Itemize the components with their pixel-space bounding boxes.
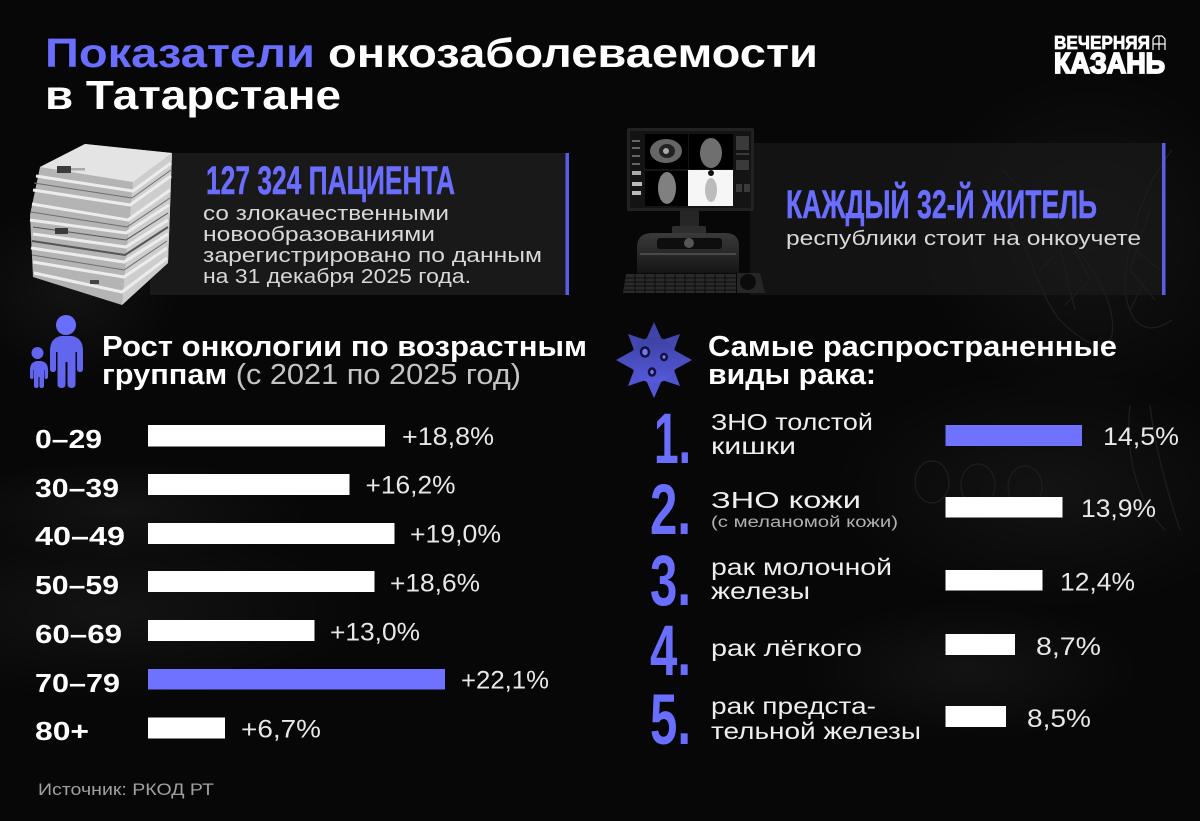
rank 4: 8,7%	[1036, 633, 1101, 661]
rank 5: тельной железы	[711, 718, 921, 744]
rank 2: ЗНО кожи	[711, 487, 861, 513]
rank 3: 3.	[650, 542, 691, 621]
rank 3	[650, 542, 1135, 621]
heading: patients count: 127 324 ПАЦИЕНТА	[206, 159, 455, 203]
rank 1: 1.	[654, 400, 691, 479]
rank 5	[650, 681, 1091, 760]
row 70–79	[35, 666, 549, 698]
text: on oncology register: республики стоит на онкоучете	[786, 227, 1141, 250]
rank 2: 2.	[650, 471, 691, 550]
rank 2: 13,9%	[1081, 495, 1156, 523]
logo: Вечерняя Казань: КАЗАНЬ	[1054, 48, 1165, 80]
row 0–29: +18,8%	[402, 423, 494, 451]
rank 5: 8,5%	[1027, 705, 1091, 733]
row 80+: +6,7%	[241, 716, 321, 744]
heading: most common cancers	[708, 331, 1117, 391]
text: patients description: на 31 декабря 2025 года.	[203, 265, 471, 288]
row 70–79: 70–79	[35, 668, 120, 698]
rank 4: 4.	[650, 612, 691, 691]
row 60–69: +13,0%	[330, 618, 420, 646]
row 80+	[35, 716, 321, 746]
row 60–69: 60–69	[35, 619, 122, 649]
title: в Татарстане	[45, 72, 341, 118]
icon: medical workstation	[623, 128, 765, 293]
panel: every 32nd resident	[623, 128, 1166, 295]
rank 3: железы	[711, 578, 810, 604]
heading: growth by age groups: группам (с 2021 по 2025 год)	[102, 359, 521, 391]
rank 3: рак молочной	[711, 554, 892, 580]
row 40–49: 40–49	[35, 521, 125, 551]
logo: Вечерняя Казань: ВЕЧЕРНЯЯ	[1054, 33, 1150, 53]
icon: cancer cell	[616, 322, 692, 398]
row 80+: 80+	[35, 716, 89, 746]
row 50–59	[35, 570, 480, 600]
rank 1: ЗНО толстой	[711, 409, 873, 435]
rank 4: рак лёгкого	[711, 635, 862, 661]
heading: most common cancers: виды рака:	[708, 359, 876, 391]
rank 3: 12,4%	[1060, 568, 1135, 596]
rank 2	[650, 471, 1156, 550]
row 40–49: +19,0%	[410, 520, 501, 548]
text: patients description: новообразованиями	[203, 223, 435, 246]
rank 1	[654, 400, 1179, 479]
row 50–59: +18,6%	[390, 570, 480, 598]
heading: most common cancers: Самые распространенные	[708, 331, 1117, 363]
title: Показатели онкозаболеваемости	[45, 30, 818, 76]
rank 5: 5.	[650, 681, 691, 760]
text: patients description: со злокачественными	[203, 202, 449, 225]
row 0–29: 0–29	[35, 424, 102, 454]
rank 5: рак предста-	[711, 693, 876, 719]
row 30–39: +16,2%	[366, 472, 456, 500]
row 50–59: 50–59	[35, 570, 119, 600]
list: cancer types	[650, 400, 1179, 760]
source: Источник: РКОД РТ	[38, 781, 214, 799]
icon: adult and child	[30, 315, 83, 388]
text: patients description	[203, 202, 542, 288]
heading: growth by age groups	[102, 331, 587, 391]
row 30–39	[35, 472, 456, 503]
row 0–29	[35, 423, 494, 454]
text: patients description: зарегистрировано по данным	[203, 244, 542, 267]
chart: growth by age	[35, 423, 549, 746]
panel: patients	[30, 144, 569, 305]
row 40–49	[35, 520, 501, 551]
rank 1: кишки	[711, 433, 796, 459]
row 70–79: +22,1%	[461, 666, 549, 694]
row 30–39: 30–39	[35, 473, 119, 503]
heading: growth by age groups: Рост онкологии по возрастным	[102, 331, 587, 363]
title	[45, 30, 818, 118]
row 60–69	[35, 618, 420, 649]
logo: Вечерняя Казань	[1054, 33, 1165, 80]
rank 4	[650, 612, 1101, 691]
rank 2: (с меланомой кожи)	[711, 514, 898, 531]
icon: paper stack	[30, 144, 172, 305]
rank 1: 14,5%	[1103, 423, 1179, 451]
